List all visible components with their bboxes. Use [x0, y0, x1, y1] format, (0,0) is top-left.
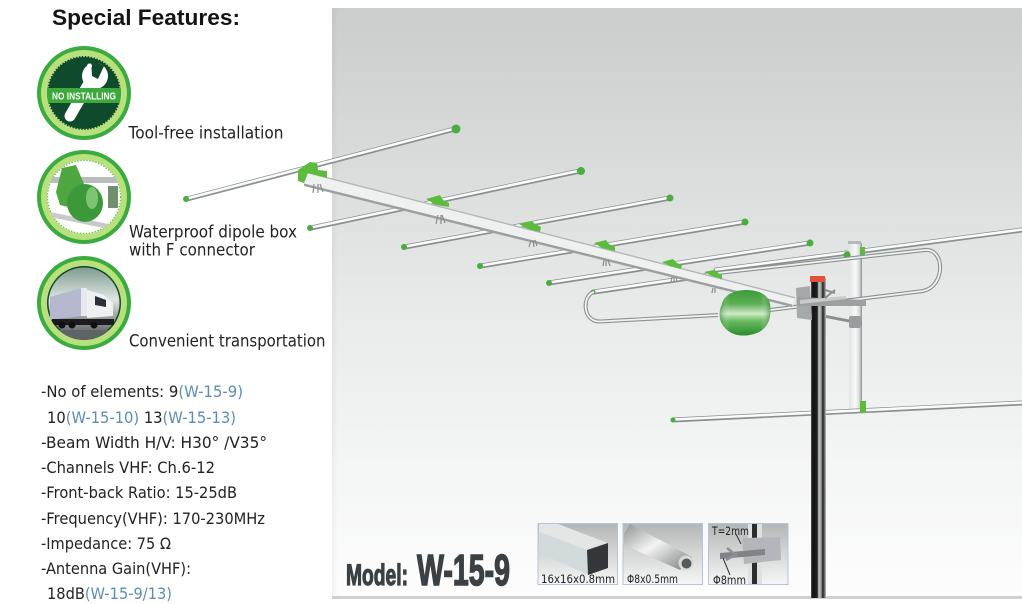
wing nuts — [313, 184, 715, 293]
specifications list: 10(W-15-10) 13(W-15-13) — [47, 408, 236, 427]
specifications list: -Channels VHF: Ch.6-12 — [41, 458, 215, 477]
thumbnail: round rod tube: Φ8x0.5mm — [627, 572, 678, 586]
thumbnail: mast clamp: T=2mm — [711, 524, 749, 538]
icon: waterproof dipole box badge — [37, 150, 131, 244]
heading: special features: Special Features: — [52, 5, 240, 30]
specifications list: -Frequency(VHF): 170-230MHz — [41, 509, 265, 528]
antenna backdrop panel — [332, 8, 1022, 599]
folded dipole — [586, 250, 940, 322]
mast — [810, 276, 826, 598]
antenna illustration — [183, 124, 1022, 598]
model label: Model: — [346, 559, 408, 592]
waterproof dipole box — [720, 290, 770, 336]
specifications list — [41, 382, 267, 603]
director rods — [187, 128, 1022, 420]
model label: W-15-9 — [417, 546, 510, 595]
thumbnail: square boom tube — [538, 524, 618, 586]
specifications list: -No of elements: 9(W-15-9) — [41, 382, 243, 401]
specifications list: -Beam Width H/V: H30° /V35° — [41, 433, 267, 452]
thumbnail: square boom tube: 16x16x0.8mm — [541, 572, 615, 586]
specifications list: -Impedance: 75 Ω — [41, 534, 171, 553]
element clips — [298, 162, 866, 413]
text: tool-free installation: Tool-free installation — [128, 124, 283, 142]
text: convenient transportation: Convenient transportation — [129, 332, 326, 350]
icon: no installing wrench badge: NO INSTALLING — [52, 92, 116, 102]
icon: truck transportation badge — [37, 256, 131, 350]
thumbnail: mast clamp: Φ8mm — [713, 573, 746, 587]
vertical support boom — [848, 241, 862, 413]
text: waterproof dipole box: with F connector — [129, 240, 255, 260]
specifications list: -Antenna Gain(VHF): — [41, 559, 191, 578]
mast clamp — [796, 286, 866, 328]
text: waterproof dipole box: Waterproof dipole box — [129, 222, 297, 242]
thumbnail: mast clamp — [708, 524, 788, 587]
specifications list: -Front-back Ratio: 15-25dB — [41, 483, 237, 502]
icon: no installing wrench badge — [37, 46, 131, 140]
text: waterproof dipole box — [129, 222, 297, 260]
specifications list: 18dB(W-15-9/13) — [47, 584, 172, 603]
main boom — [304, 171, 795, 307]
green rod tips — [183, 124, 850, 422]
thumbnail: round rod tube — [623, 524, 702, 586]
model label — [346, 546, 510, 595]
